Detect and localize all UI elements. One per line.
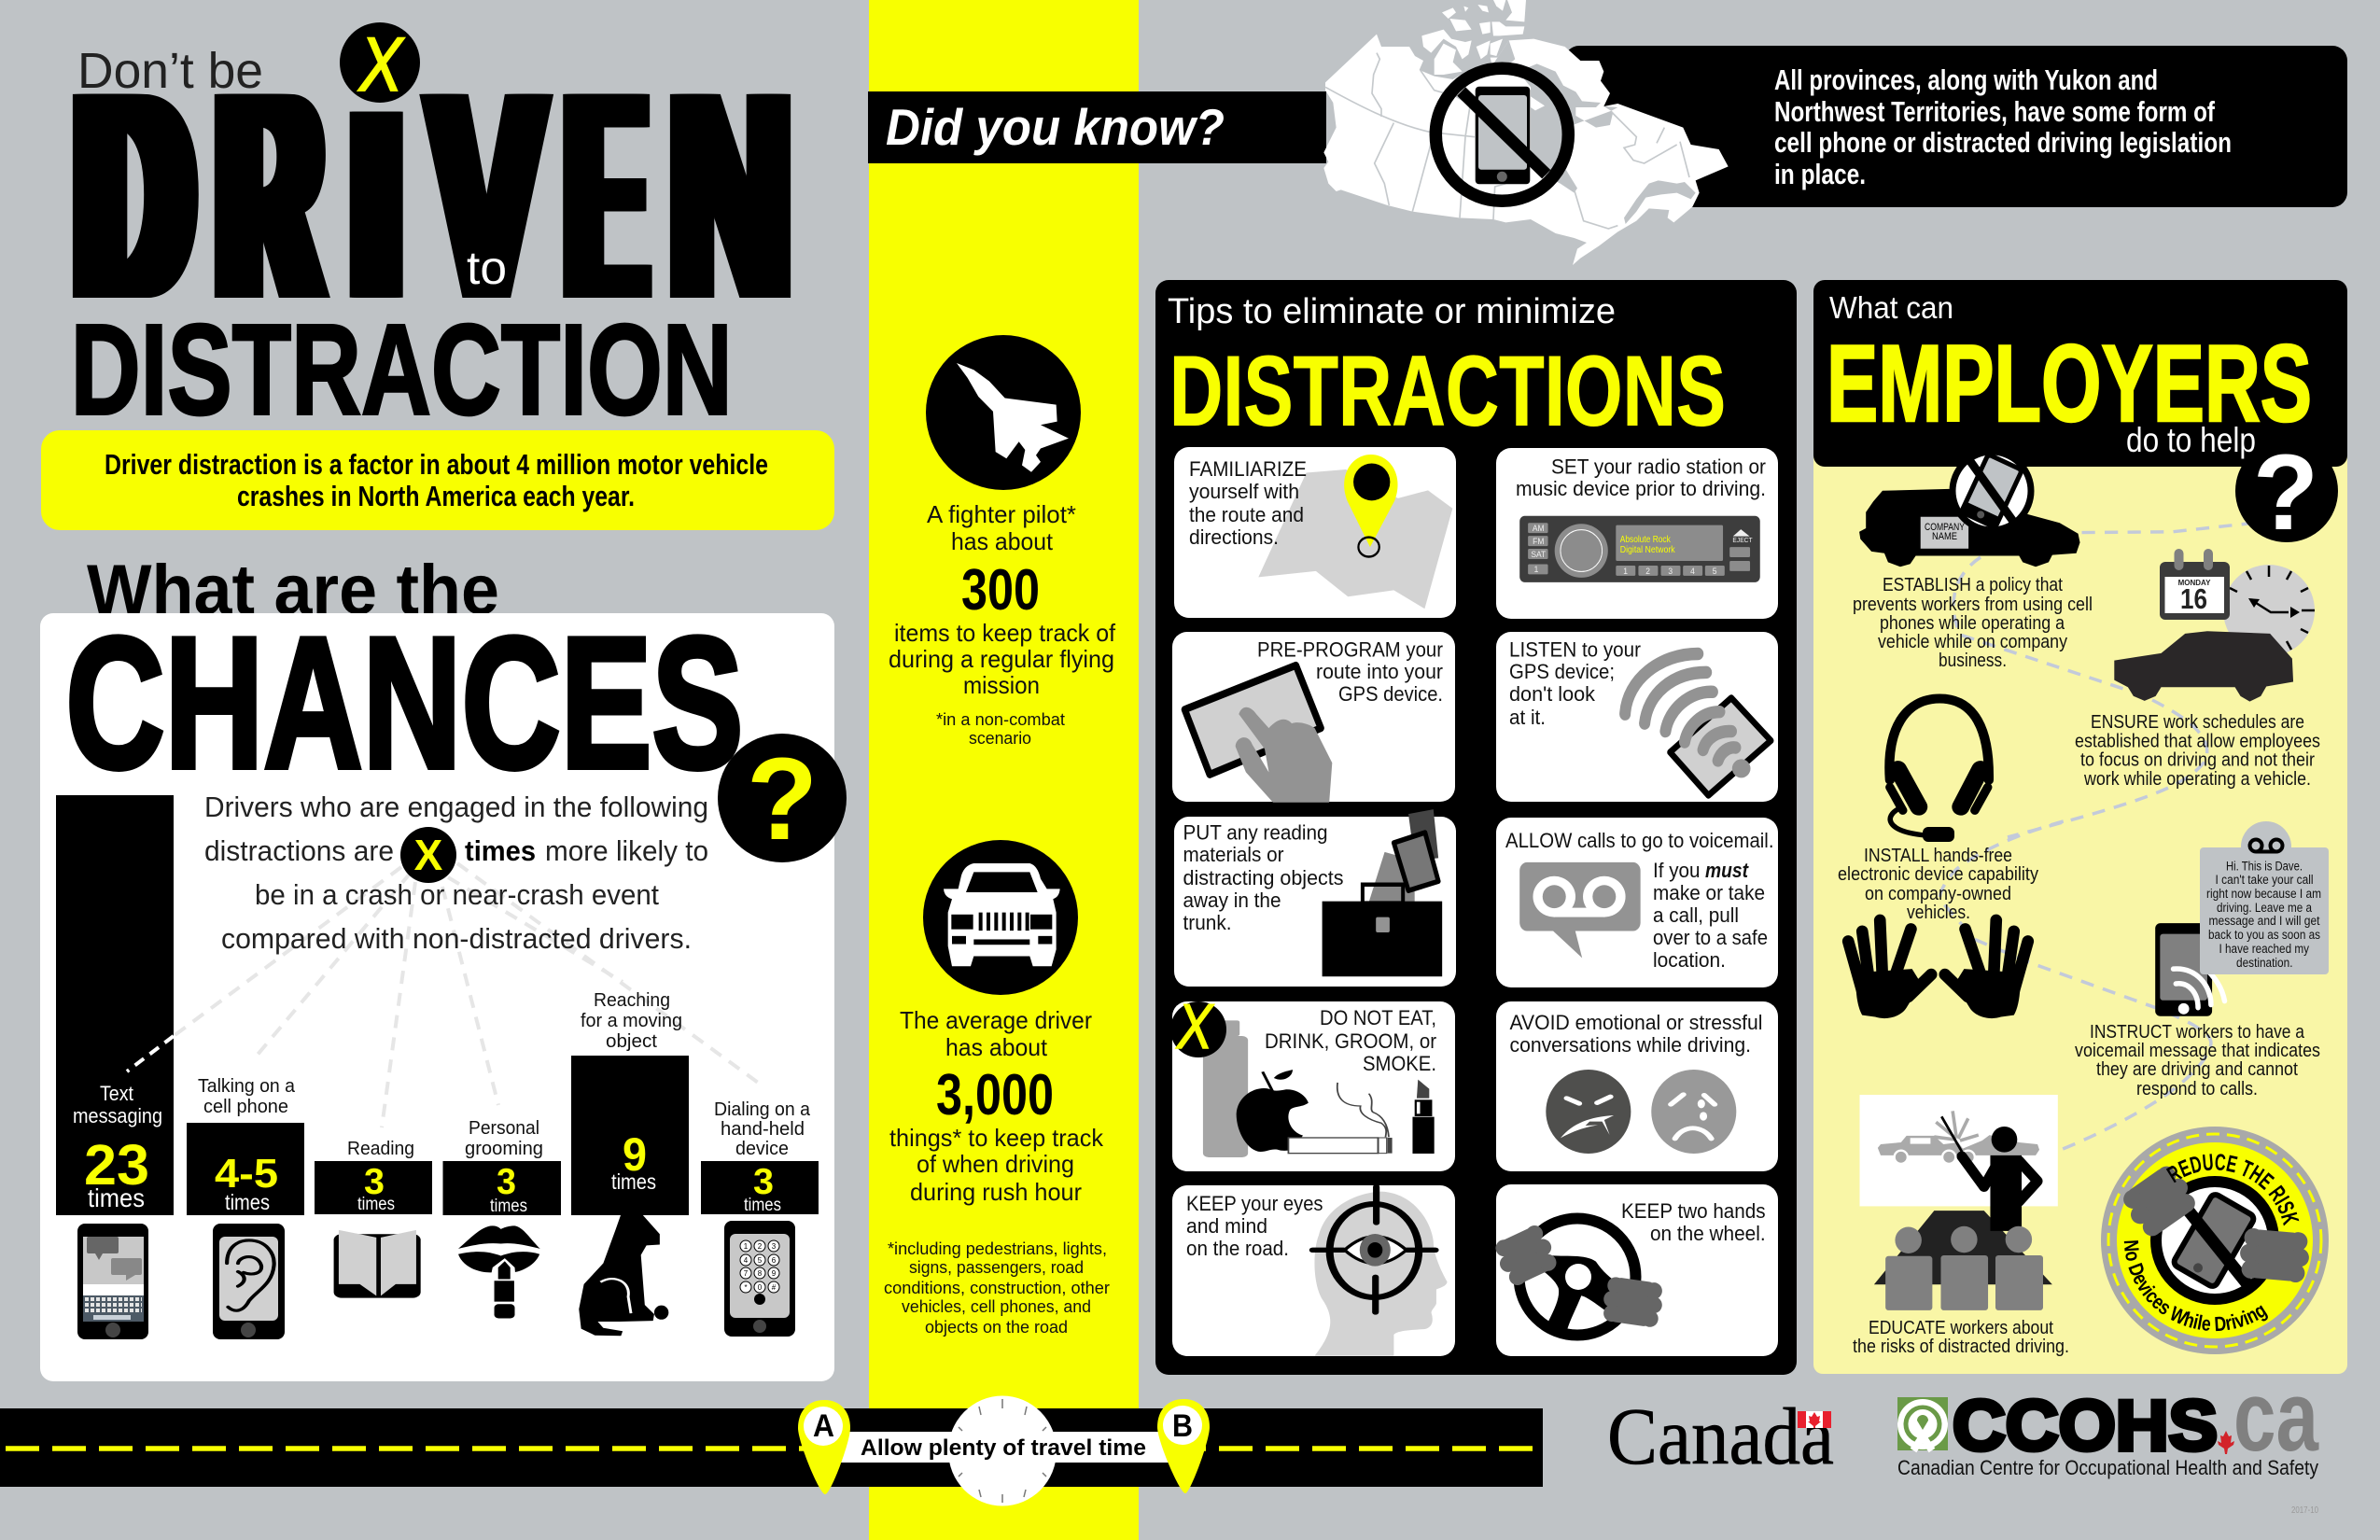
clock and travel time label [837,1396,1175,1506]
card: pre-program: route into your [1316,660,1443,683]
text: average driver fact: of when driving [917,1150,1074,1178]
text: instruct workers: INSTRUCT workers to have a [2090,1022,2305,1043]
text: drivers are X times more likely: times [465,834,536,867]
bar: text messaging 23 times: Text [100,1082,133,1105]
bar: reading 3 times [315,1139,432,1214]
bar: personal grooming 3 times: Personal [469,1118,539,1139]
text: average driver fact [884,1006,1110,1337]
panel: legislation callout: in place. [1774,158,1866,190]
icon: phone with keypad: 8 [758,1269,763,1278]
card: set radio [1496,448,1778,619]
text: drivers are X times more likely: compared with non-distracted drivers. [221,922,692,955]
header: employers: What can [1829,290,1953,325]
text: instruct workers: respond to calls. [2136,1079,2258,1099]
card: put reading materials in trunk: trunk. [1183,911,1232,934]
text: average driver fact: *including pedestrians, lights, [888,1239,1107,1258]
icon: open book [334,1230,421,1298]
card: keep two hands on the wheel [1491,1184,1778,1356]
bar: dialing on a hand-held device 3 times: hand-held [721,1119,805,1140]
icon: phone with keypad: 7 [744,1269,749,1278]
icon: lips and lipstick [458,1225,540,1318]
badge: reduce the risk: No Devices While Driving [2124,1240,2268,1331]
bar: personal grooming 3 times: 3 [497,1162,516,1202]
card: allow calls to voicemail: location. [1653,948,1726,972]
logo: Canada wordmark: Canada [1607,1391,1834,1481]
badge: reduce the risk [2101,1127,2329,1354]
icon: question mark: ? [747,735,818,864]
bar: reaching for a moving object 9 times: for a moving [581,1011,682,1031]
card: set radio: music device prior to driving. [1516,477,1766,500]
card: listen to GPS: GPS device; [1509,660,1615,683]
bar: talking on a cell phone 4-5 times [187,1076,304,1215]
bar: text messaging 23 times: 23 [84,1133,149,1197]
card: set radio: FM [1533,537,1544,546]
text: instruct workers: they are driving and cannot [2096,1059,2298,1080]
card: allow calls to voicemail: ALLOW calls to go to voicemail. [1505,829,1773,852]
icon: fighter jet [926,335,1081,490]
text: average driver fact: conditions, construction, other [884,1279,1110,1297]
icon: phone with keypad: 4 [744,1256,749,1265]
icon: phone with keypad: 6 [772,1256,777,1265]
card: do not eat, drink, groom or smoke: DRINK, GROOM, or [1265,1029,1436,1053]
icon: X badge on card: X [1175,991,1214,1062]
panel: tips to minimize distractions [1155,280,1797,1375]
icon: dog [579,1198,668,1336]
badge: reduce the risk: REDUCE THE RISK [2165,1154,2300,1226]
speech bubble: voicemail greeting [2200,821,2329,974]
text: drivers are X times more likely: be in a crash or near-crash event [255,878,659,911]
bar: reading 3 times: 3 [364,1162,385,1202]
bar: dialing on a hand-held device 3 times: times [744,1196,781,1215]
logo: CCOHS.ca wordmark: ca [2233,1360,2319,1472]
text: establish a policy: vehicle while on company [1878,632,2067,652]
yellow centre column [869,0,1139,1540]
card: pre-program [1172,632,1455,803]
text: fighter pilot fact: 300 [961,558,1040,623]
card: familiarize: directions. [1189,525,1279,549]
text: install hands-free: vehicles. [1907,903,1970,923]
icon: pin B [1157,1399,1210,1493]
bar: personal grooming 3 times: grooming [465,1139,543,1159]
callout: 4 million crashes: crashes in North America each year. [237,480,635,512]
text: fighter pilot fact [889,500,1116,748]
card: set radio: SAT [1531,550,1547,559]
title: DISTRACTION: DISTRACTION [71,299,733,442]
bar: dialing on a hand-held device 3 times: 3 [753,1162,774,1202]
text: establish a policy: business. [1939,651,2007,671]
card: set radio: Digital Network [1620,545,1675,555]
text: fighter pilot fact: A fighter pilot* [927,500,1076,528]
icon: phone with keypad [724,1221,795,1337]
map: Canada [1323,0,1729,265]
text: ensure work schedules: ENSURE work schedules are [2091,712,2304,733]
bar: talking on a cell phone 4-5 times: cell phone [203,1097,288,1117]
icon: X badge [340,22,420,107]
card: put reading materials in trunk: materials or [1183,843,1284,866]
icon: phone with voicemail signal [2155,923,2225,1016]
bar: reaching for a moving object 9 times: times [611,1169,656,1194]
clock and travel time label: Allow plenty of travel time [861,1435,1146,1461]
card: put reading materials in trunk: PUT any reading [1183,821,1327,844]
card: listen to GPS: LISTEN to your [1509,638,1641,661]
bar: text messaging 23 times: times [88,1183,145,1212]
text: fighter pilot fact: during a regular flying [889,645,1114,673]
card: set radio: Absolute Rock [1620,535,1671,545]
card: familiarize: yourself with [1189,480,1299,503]
text: install hands-free: INSTALL hands-free [1864,846,2012,866]
logo: CCOHS.ca wordmark [1897,1360,2319,1479]
icon: question mark: ? [2253,433,2318,553]
bar: dialing on a hand-held device 3 times [701,1099,819,1215]
card: set radio: 5 [1713,566,1716,576]
text: drivers are X times more likely: Drivers who are engaged in the following [204,791,708,823]
icon: phone with keypad: * [744,1283,748,1292]
text: drivers are X times more likely: distractions are [204,834,394,867]
text: average driver fact: vehicles, cell phones, and [902,1297,1091,1316]
panel: legislation callout: cell phone or distracted driving legislation [1774,126,2232,159]
text: educate workers: EDUCATE workers about [1869,1318,2053,1338]
icon: SUV [2114,631,2293,702]
card: put reading materials in trunk [1174,809,1456,987]
card: keep your eyes on the road: KEEP your eyes [1186,1192,1323,1215]
icon: presenter and audience [1859,1095,2058,1310]
text: fighter pilot fact: *in a non-combat [936,710,1065,729]
bar: reaching for a moving object 9 times: object [606,1031,657,1052]
card: keep two hands on the wheel: KEEP two hands [1621,1199,1766,1223]
text: fighter pilot fact: mission [963,671,1040,699]
title: DRIVEN: R [205,31,304,361]
panel: chances [40,599,847,1381]
title: DRIVEN: I [340,54,381,356]
text: install hands-free: electronic device capability [1838,864,2038,885]
panel: legislation callout [1564,46,2347,207]
text: average driver fact: things* to keep track [889,1124,1104,1152]
icon: car front view [923,840,1078,995]
speech bubble: voicemail greeting: back to you as soon as [2208,928,2320,942]
text: drivers are X times more likely: more likely to [545,834,708,867]
card: allow calls to voicemail: a call, pull [1653,903,1739,927]
speech bubble: voicemail greeting: I have reached my [2219,942,2309,956]
heading: tips to eliminate or minimize: Tips to eliminate or minimize [1168,292,1616,331]
icon: X badge: X [357,22,405,107]
icon: pin A: A [813,1408,834,1444]
bar: text messaging 23 times [56,795,174,1215]
icon: pin A [798,1400,850,1494]
speech bubble: voicemail greeting: message and I will get [2208,914,2320,928]
card: keep your eyes on the road: on the road. [1186,1237,1289,1260]
panel: did you know banner [868,91,1326,163]
icon: phone with keypad: 1 [744,1242,749,1251]
text: average driver fact: during rush hour [910,1178,1082,1206]
icon: phone with keypad: 3 [772,1242,777,1251]
card: allow calls to voicemail: make or take [1653,881,1765,904]
logo: CCOHS emblem [1897,1397,1948,1450]
icon: clock and calendar: MONDAY [2178,579,2211,587]
card: pre-program: PRE-PROGRAM your [1257,638,1443,661]
card: keep your eyes on the road: and mind [1186,1214,1267,1238]
speech bubble: voicemail greeting: Hi. This is Dave. [2226,860,2303,874]
header: employers [1813,280,2347,467]
logo: CCOHS.ca wordmark: Canadian Centre for Occupational Health and Safety [1897,1456,2318,1479]
title: DRIVEN: E [555,31,632,361]
card: set radio: 4 [1690,566,1695,576]
title: DRIVEN [63,31,791,361]
text: establish a policy [1853,575,2093,671]
panel: did you know banner: Did you know? [886,98,1225,156]
panel: what can employers do [1813,280,2347,1374]
speech bubble: voicemail greeting: I can't take your call [2216,873,2313,887]
speech bubble: voicemail greeting: destination. [2236,956,2292,970]
card: do not eat, drink, groom or smoke: SMOKE. [1363,1052,1436,1075]
callout: 4 million crashes [41,430,834,530]
title: DRIVEN: D [63,31,173,361]
card: set radio: EJECT [1732,537,1753,544]
title: DRIVEN: N [659,31,778,361]
card: put reading materials in trunk: distracting objects [1183,866,1344,889]
icon: phone with keypad: 2 [758,1242,763,1251]
text: install hands-free: on company-owned [1865,884,2011,904]
text: ensure work schedules [2075,712,2320,790]
card: allow calls to voicemail: over to a safe [1653,926,1768,949]
word: to: to [467,242,507,294]
text: establish a policy: ESTABLISH a policy that [1883,575,2063,595]
header: employers: do to help [2126,421,2256,459]
panel: legislation callout: Northwest Territories, have some form of [1774,95,2216,128]
heading: Don't be: Don’t be [77,43,263,99]
bar: reading 3 times: Reading [347,1139,414,1159]
text: average driver fact: signs, passengers, road [909,1258,1084,1277]
card: avoid emotional conversations: conversations while driving. [1510,1033,1751,1057]
text: ensure work schedules: to focus on driving and not their [2080,750,2315,771]
text: educate workers [1853,1318,2069,1357]
card: do not eat, drink, groom or smoke [1172,1001,1455,1171]
card: set radio: 1 [1623,566,1628,576]
card: pre-program: GPS device. [1338,682,1443,706]
text: average driver fact: 3,000 [936,1063,1054,1127]
card: do not eat, drink, groom or smoke: DO NOT EAT, [1320,1006,1436,1029]
icon: phone with keypad: 9 [772,1269,777,1278]
card: allow calls to voicemail: If you [1653,859,1701,882]
text: average driver fact: The average driver [900,1006,1092,1034]
text: instruct workers: voicemail message that indicates [2075,1041,2320,1061]
card: familiarize [1174,447,1456,618]
icon: company car with no phone sign [1859,452,2080,567]
title: DRIVEN: V [418,31,531,361]
text: fighter pilot fact: has about [951,527,1054,555]
card: set radio: AM [1533,524,1545,533]
card: put reading materials in trunk: away in the [1183,889,1281,912]
card: familiarize: the route and [1189,503,1304,526]
icon: company car with no phone sign: NAME [1932,531,1957,542]
card: set radio: 1 [1534,565,1538,574]
speech bubble: voicemail greeting: right now because I am [2206,887,2321,901]
bar: reaching for a moving object 9 times: Reaching [594,990,670,1011]
road with dashed centre line [0,1408,1543,1487]
icon: pin B: B [1172,1408,1193,1444]
bar: reaching for a moving object 9 times [571,990,689,1215]
date code: 2017-10 [2291,1505,2318,1516]
text: instruct workers [2075,1022,2320,1099]
icon: no phone sign [1435,68,1568,201]
icon: question mark [718,734,847,864]
heading: CHANCES: CHANCES [65,599,743,807]
heading: DISTRACTIONS: DISTRACTIONS [1169,336,1726,446]
card: allow calls to voicemail: must [1705,859,1749,882]
text: establish a policy: phones while operating a [1880,613,2065,634]
bar: talking on a cell phone 4-5 times: 4-5 [215,1151,278,1197]
text: fighter pilot fact: items to keep track of [894,619,1116,647]
bar: talking on a cell phone 4-5 times: Talking on a [198,1076,296,1097]
speech bubble: voicemail greeting: driving. Leave me a [2217,901,2312,915]
icon: clock and calendar [2160,553,2315,656]
icon: phone with ear [213,1224,285,1339]
icon: phone with keypad: # [772,1283,777,1292]
bar: text messaging 23 times: messaging [73,1104,162,1127]
card: set radio: SET your radio station or [1551,455,1766,478]
card: keep your eyes on the road [1172,1185,1455,1356]
text: fighter pilot fact: scenario [969,729,1031,748]
icon: company car with no phone sign: COMPANY [1925,522,1966,533]
icon: clock and calendar: 16 [2180,582,2207,615]
icon: question mark [2235,433,2338,553]
bar: talking on a cell phone 4-5 times: times [225,1190,270,1214]
card: familiarize: FAMILIARIZE [1189,457,1307,481]
icon: phone with keypad: 0 [758,1283,763,1292]
text: ensure work schedules: established that allow employees [2075,732,2320,752]
bar: dialing on a hand-held device 3 times: device [735,1139,789,1159]
panel: legislation callout: All provinces, along with Yukon and [1774,63,2158,96]
bar: reaching for a moving object 9 times: 9 [623,1128,647,1181]
card: listen to GPS: at it. [1509,706,1546,729]
card: set radio: 3 [1668,566,1673,576]
dashed connector lines [174,863,761,1127]
icon: headset [1889,699,1989,842]
card: keep two hands on the wheel: on the wheel. [1650,1222,1766,1245]
text: educate workers: the risks of distracted driving. [1853,1337,2069,1357]
bar: dialing on a hand-held device 3 times: Dialing on a [714,1099,811,1120]
icon: phone with chat and keyboard [77,1224,148,1339]
text: establish a policy: prevents workers from using cell [1853,595,2093,615]
callout: 4 million crashes: Driver distraction is a factor in about 4 million motor vehicle [105,448,768,481]
card: allow calls to voicemail [1496,818,1778,987]
card: avoid emotional conversations: AVOID emotional or stressful [1510,1011,1762,1034]
logo: CCOHS.ca wordmark: CCOHS [1953,1387,2218,1465]
bar: personal grooming 3 times: times [490,1197,527,1216]
text: average driver fact: has about [945,1033,1048,1061]
icon: raised hands [1848,920,2028,1018]
icon: phone with keypad: 5 [758,1256,763,1265]
card: listen to GPS: don't look [1509,682,1596,706]
card: listen to GPS [1496,632,1778,802]
text: drivers are X times more likely [204,791,708,955]
dashed connector lines [1939,524,2247,1151]
heading: What are the: What are the [87,551,499,630]
bar: personal grooming 3 times [442,1118,561,1216]
text: install hands-free [1838,846,2038,923]
text: ensure work schedules: work while operating a vehicle. [2083,769,2311,790]
text: drivers are X times more likely: X [414,831,443,879]
text: average driver fact: objects on the road [925,1318,1068,1337]
card: avoid emotional conversations [1496,1001,1778,1171]
card: set radio: 2 [1645,566,1650,576]
bar: reading 3 times: times [357,1195,395,1214]
